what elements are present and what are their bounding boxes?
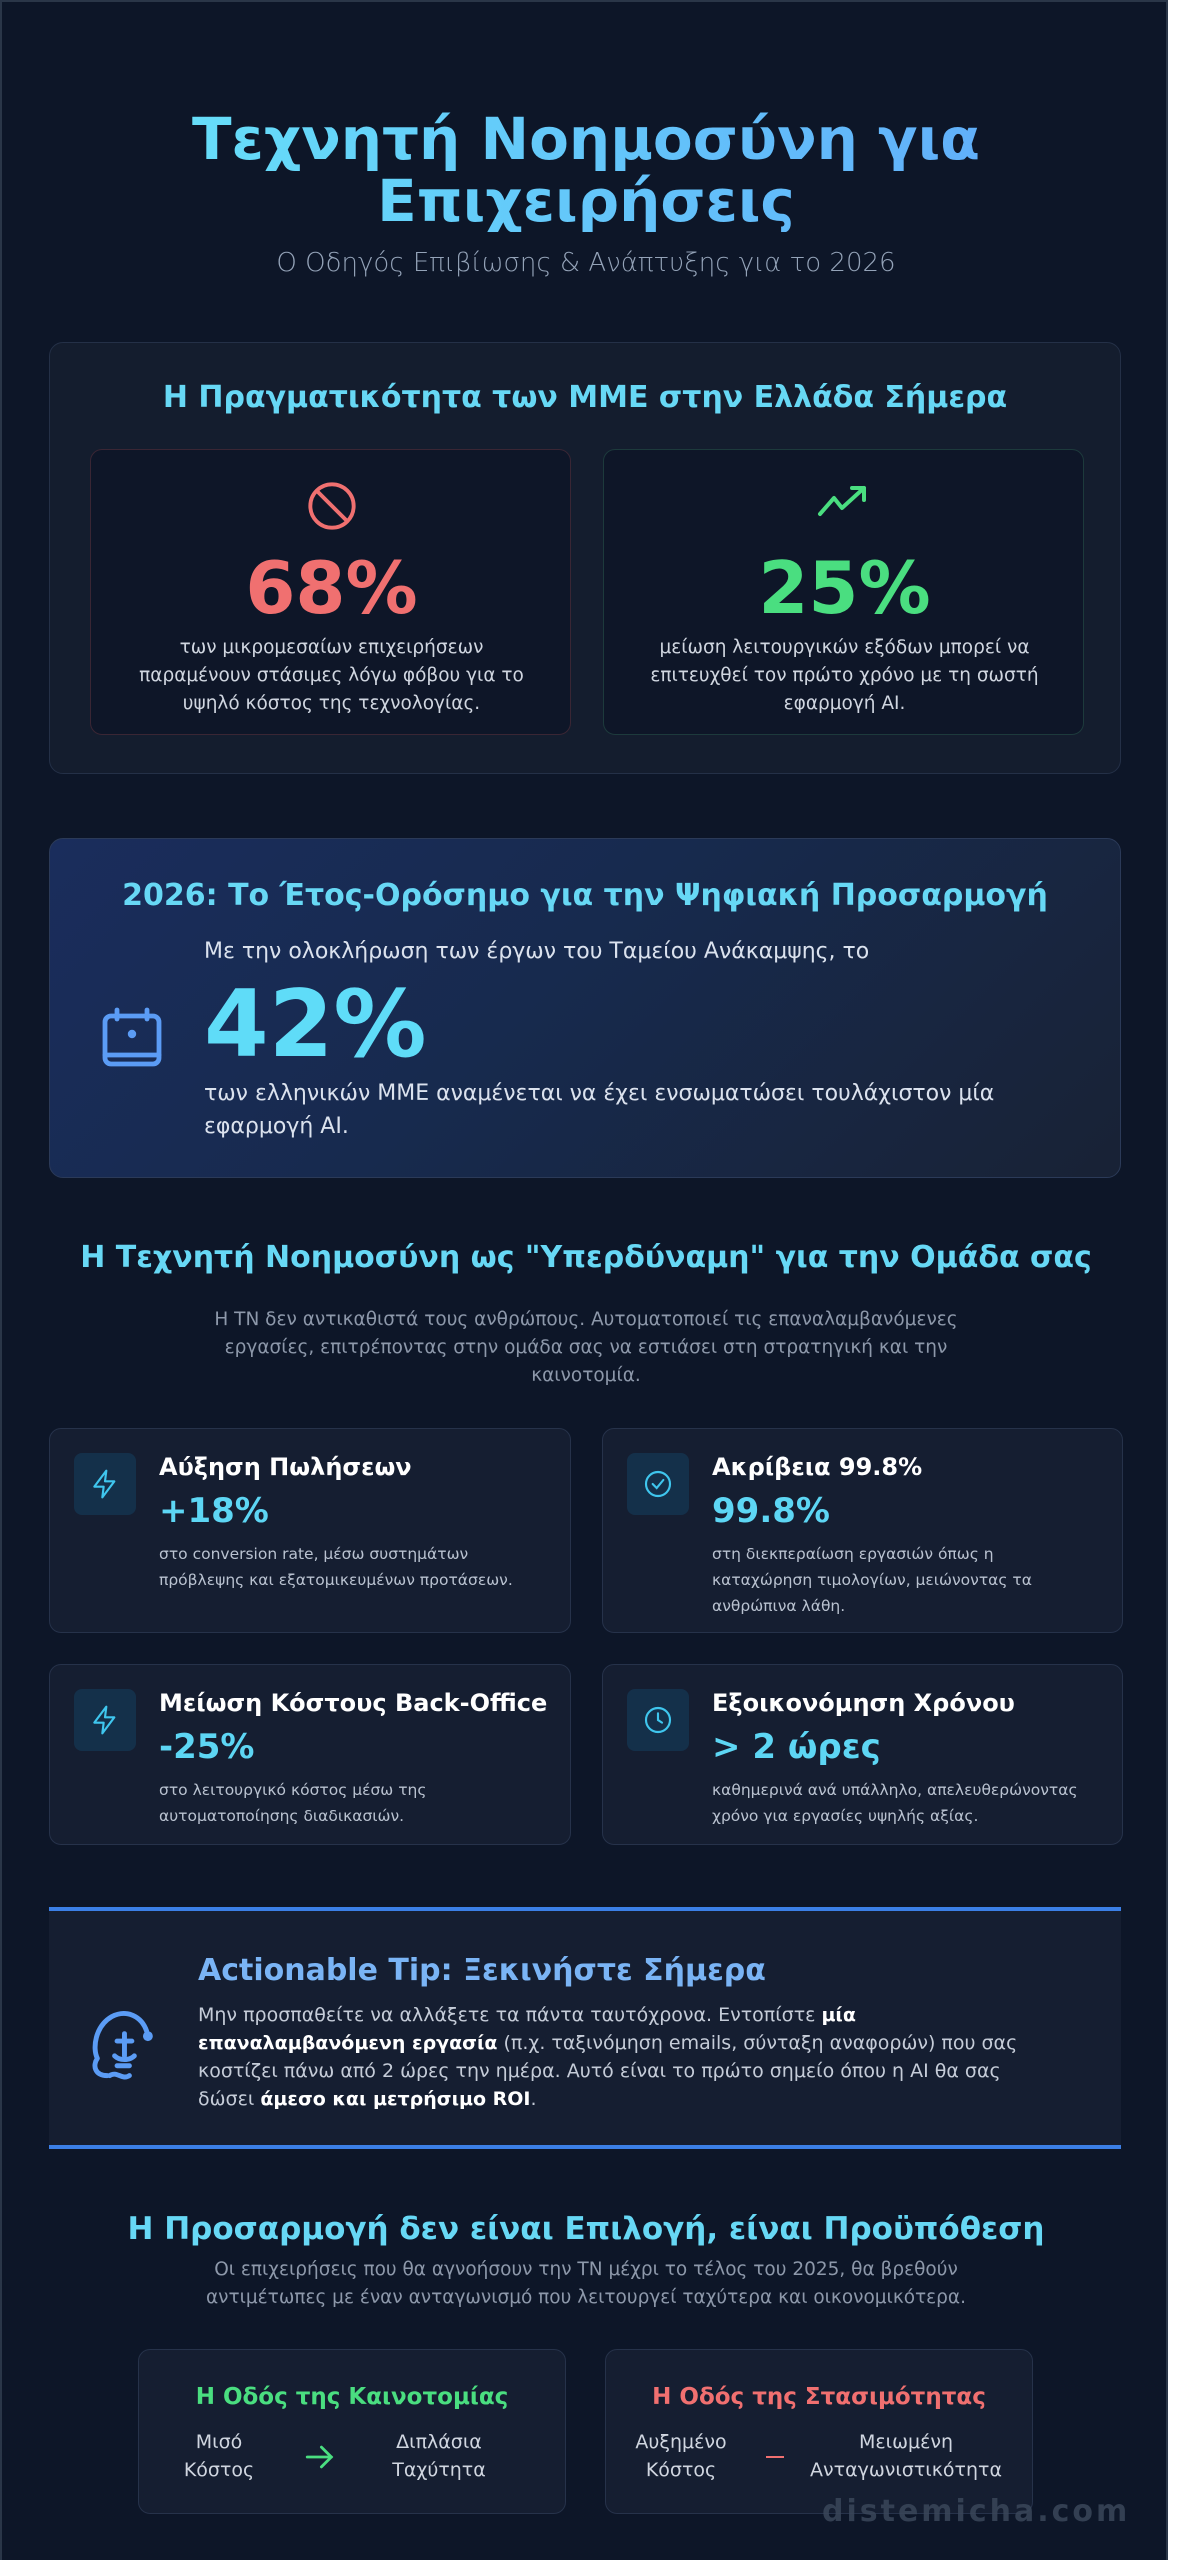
- right label: Ταχύτητα: [392, 2459, 486, 2481]
- heading: 2026: Το Έτος-Ορόσημο για την Ψηφιακή Προσαρμογή: [122, 878, 1048, 913]
- card: time: Εξοικονόμηση Χρόνου: [712, 1689, 1015, 1717]
- right label: Ανταγωνιστικότητα: [810, 2459, 1002, 2481]
- left label: Κόστος: [184, 2459, 254, 2481]
- number: 25%: [758, 546, 931, 630]
- left label: Κόστος: [646, 2459, 716, 2481]
- title: Τεχνητή Νοημοσύνη για: [192, 105, 980, 173]
- section intro: Η ΤΝ δεν αντικαθιστά τους ανθρώπους. Αυτοματοποιεί τις επαναλαμβανόμενες εργασίες, επιτρέποντας στην ομάδα σας να εστιάσει στη στρατηγική και την καινοτομία.: [214, 1309, 958, 1386]
- card: time: καθημερινά ανά υπάλληλο, απελευθερώνοντας χρόνο για εργασίες υψηλής αξίας.: [712, 1781, 1078, 1825]
- card: accuracy: 99.8%: [712, 1491, 830, 1531]
- tip title: Actionable Tip: Ξεκινήστε Σήμερα: [198, 1953, 766, 1988]
- left label: [184, 2431, 254, 2481]
- heading: Η Πραγματικότητα των ΜΜΕ στην Ελλάδα Σήμερα: [163, 380, 1007, 415]
- icon: trend up: [818, 486, 866, 516]
- tip text: Μην προσπαθείτε να αλλάξετε τα πάντα ταυτόχρονα. Εντοπίστε μία: [198, 2004, 856, 2026]
- panel: greek SME reality: [49, 342, 1121, 774]
- card: innovation path: [138, 2349, 566, 2514]
- card: sales: +18%: [159, 1491, 269, 1531]
- card: time: > 2 ώρες: [712, 1727, 881, 1767]
- dash: [766, 2456, 784, 2458]
- icon: head: [92, 2011, 153, 2080]
- card title: Η Οδός της Στασιμότητας: [652, 2384, 986, 2410]
- right label: [810, 2431, 1002, 2481]
- stat card: 25%: [603, 449, 1084, 735]
- arrow: [306, 2446, 334, 2468]
- card: back-office: στο λειτουργικό κόστος μέσω της αυτοματοποίησης διαδικασιών.: [159, 1781, 426, 1825]
- card: back-office: -25%: [159, 1727, 254, 1767]
- watermark: distemicha.com: [822, 2494, 1130, 2529]
- card: sales: στο conversion rate, μέσω συστημάτων: [159, 1545, 468, 1563]
- icon: bolt: [74, 1689, 136, 1751]
- right label: [392, 2431, 486, 2481]
- icon: check: [627, 1453, 689, 1515]
- text block with 42%: [204, 939, 994, 1139]
- card: back-office: Μείωση Κόστους Back-Office: [159, 1689, 547, 1717]
- card: accuracy: Ακρίβεια 99.8%: [712, 1453, 922, 1481]
- subtitle: Ο Οδηγός Επιβίωσης & Ανάπτυξης για το 2026: [276, 248, 896, 278]
- card: back-office: [49, 1664, 571, 1845]
- text block with 42%: Με την ολοκλήρωση των έργων του Ταμείου Ανάκαμψης, το: [204, 939, 869, 964]
- right label: Διπλάσια: [396, 2431, 482, 2453]
- icon: prohibited: [308, 482, 356, 530]
- callout: actionable tip: [49, 1907, 1121, 2149]
- stat card: 68%: [90, 449, 571, 735]
- card: accuracy: [602, 1428, 1123, 1633]
- number: 68%: [245, 546, 418, 630]
- icon: bolt: [74, 1453, 136, 1515]
- description: [139, 637, 524, 714]
- title: Επιχειρήσεις: [377, 167, 795, 235]
- title: [2, 108, 1170, 232]
- card: stagnation path: [605, 2349, 1033, 2514]
- icon: calendar: [102, 1008, 162, 1066]
- tip text: επαναλαμβανόμενη εργασία (π.χ. ταξινόμηση emails, σύνταξη αναφορών) που σας κοστίζει πάνω από 2 ώρες την ημέρα. Αυτό είναι το πρώτο σημείο όπου η AI θα σας δώσει άμεσο και μετρήσιμο ROI.: [198, 2032, 1017, 2110]
- card: time: [602, 1664, 1123, 1845]
- description: των μικρομεσαίων επιχειρήσεων: [180, 637, 483, 658]
- big number: 42%: [204, 970, 427, 1078]
- card title: Η Οδός της Καινοτομίας: [196, 2384, 508, 2410]
- text block with 42%: των ελληνικών ΜΜΕ αναμένεται να έχει ενσωματώσει τουλάχιστον μία εφαρμογή AI.: [204, 1081, 994, 1139]
- description: παραμένουν στάσιμες λόγω φόβου για το υψηλό κόστος της τεχνολογίας.: [139, 665, 524, 714]
- card: sales: [49, 1428, 571, 1633]
- panel: 2026 milestone: [49, 838, 1121, 1178]
- card: sales: Αύξηση Πωλήσεων: [159, 1453, 412, 1481]
- left label: [635, 2431, 727, 2481]
- card: sales: πρόβλεψης και εξατομικευμένων προτάσεων.: [159, 1571, 513, 1589]
- section heading: superpower: Η Τεχνητή Νοημοσύνη ως "Υπερδύναμη" για την Ομάδα σας: [80, 1240, 1092, 1275]
- icon: clock: [627, 1689, 689, 1751]
- left label: Αυξημένο: [635, 2431, 727, 2453]
- card: accuracy: στη διεκπεραίωση εργασιών όπως η καταχώρηση τιμολογίων, μειώνοντας τα ανθρώπινα λάθη.: [712, 1545, 1032, 1615]
- left label: Μισό: [196, 2431, 242, 2453]
- description: μείωση λειτουργικών εξόδων μπορεί να επιτευχθεί τον πρώτο χρόνο με τη σωστή εφαρμογή AI.: [650, 637, 1039, 714]
- section text: Οι επιχειρήσεις που θα αγνοήσουν την ΤΝ μέχρι το τέλος του 2025, θα βρεθούν αντιμέτωπες με έναν ανταγωνισμό που λειτουργεί ταχύτερα και οικονομικότερα.: [206, 2259, 966, 2308]
- right label: Μειωμένη: [859, 2431, 953, 2453]
- section heading: adaptation: Η Προσαρμογή δεν είναι Επιλογή, είναι Προϋπόθεση: [128, 2211, 1044, 2247]
